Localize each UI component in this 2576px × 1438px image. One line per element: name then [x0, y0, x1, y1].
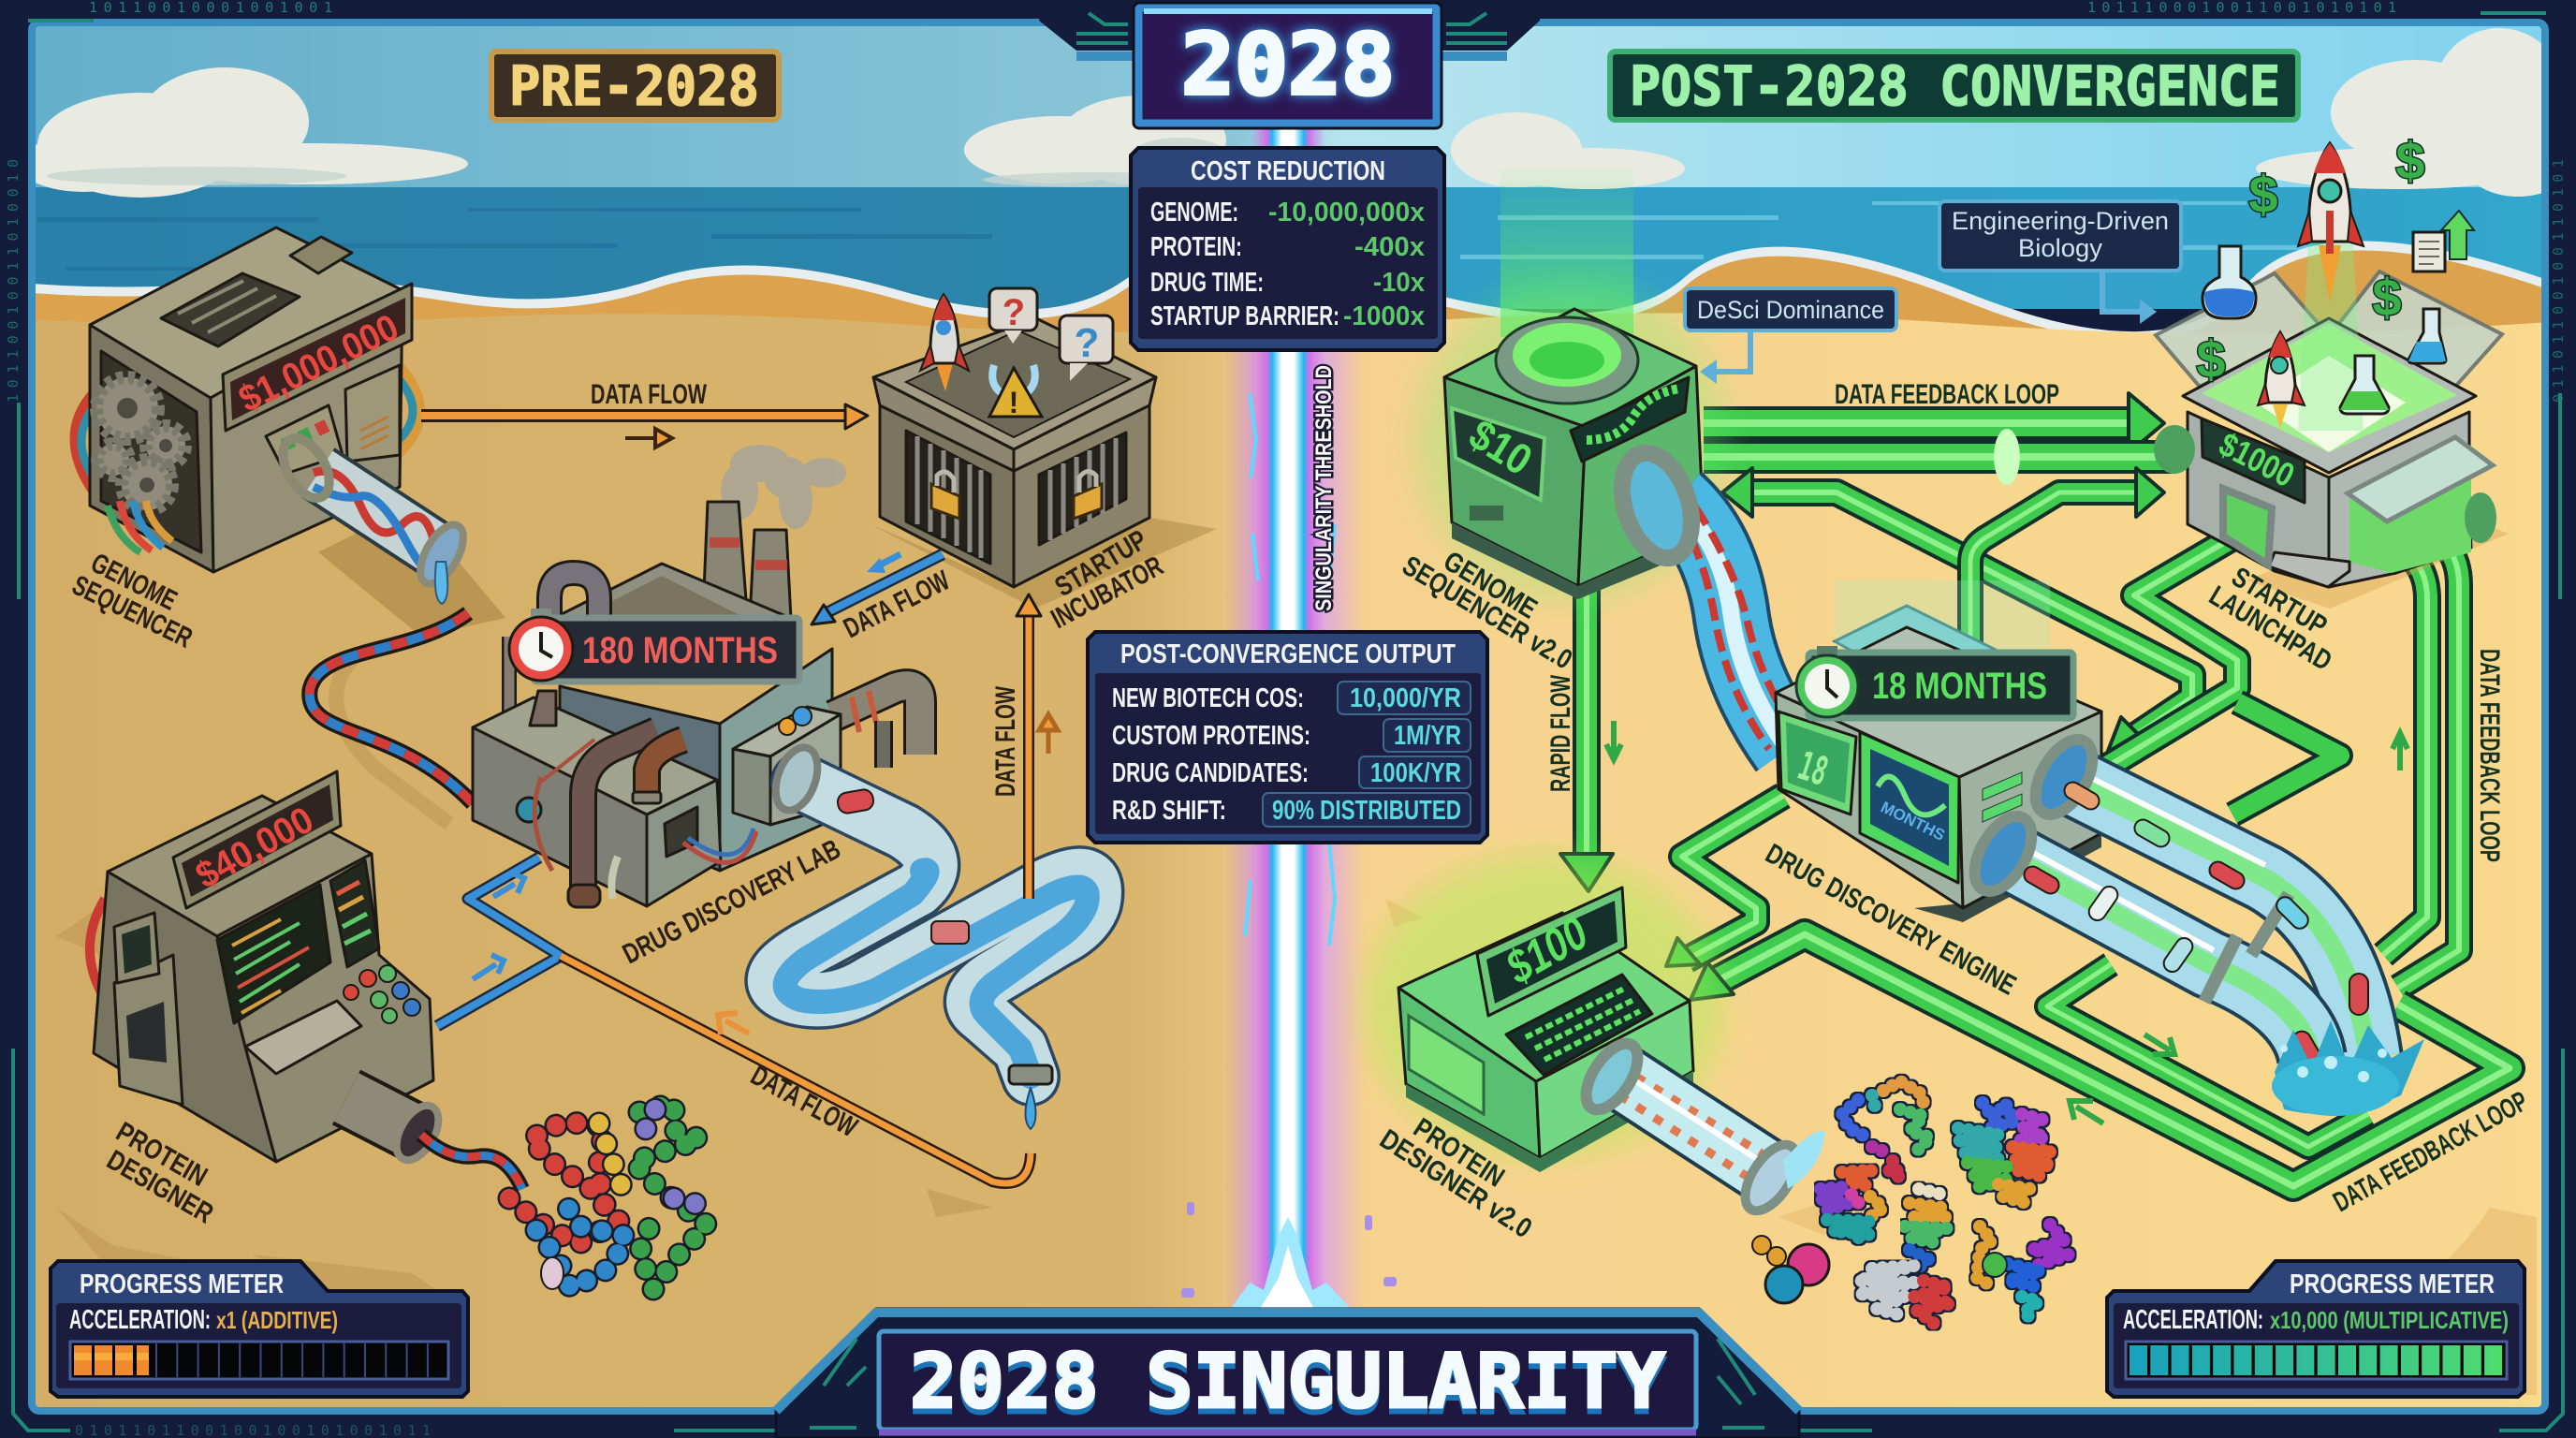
glass pipe serpentine: [768, 741, 1094, 1129]
pipe: upper data feedback loop: [1704, 393, 2164, 453]
row: r&d shift: R&D SHIFT:: [1112, 796, 1226, 826]
row: genome: GENOME:: [1150, 198, 1238, 227]
row: protein: [1150, 232, 1425, 262]
callout: engineering-driven biology: [1939, 201, 2181, 324]
row: protein: PROTEIN:: [1150, 232, 1242, 262]
icon: warning triangle: !: [1009, 386, 1018, 419]
machine: genome sequencer v2.0: $10: [1461, 409, 1541, 485]
row: custom proteins: 1M/YR: [1394, 721, 1461, 751]
pipe: engine to launchpad: [1970, 468, 2164, 655]
label: genome sequencer v2.0: SEQUENCER v2.0: [1397, 550, 1577, 676]
pipe: large data feedback loop: [1690, 934, 2510, 1186]
row: genome: [1150, 198, 1425, 227]
row: drug time: -10x: [1373, 268, 1425, 298]
label: genome sequencer: SEQUENCER: [67, 570, 198, 654]
folded proteins: [1752, 1081, 2069, 1325]
amino acid chain: bead protein: [421, 1103, 711, 1289]
machine: genome sequencer (legacy): $1,000,000: [232, 307, 405, 420]
water pipe with DNA to engine: [1610, 444, 1797, 749]
label: startup incubator: INCUBATOR: [1046, 550, 1168, 635]
arrow: vertical orange data flow: DATA FLOW: [990, 686, 1021, 797]
clouds: [19, 28, 2574, 198]
protein cluster: helix: [1905, 1189, 1952, 1269]
icon: question bubble blue: [1060, 315, 1113, 381]
icon: small rocket: [2258, 332, 2305, 429]
acceleration readout: x1 (ADDITIVE): [216, 1306, 338, 1334]
small green direction arrows: [1606, 721, 2408, 1123]
acceleration readout: ACCELERATION:: [2123, 1305, 2263, 1335]
label: drug discovery lab: DRUG DISCOVERY LAB: [618, 834, 845, 970]
glass tubes from engine to splash: [1963, 730, 2368, 1058]
icon: document: [2413, 232, 2445, 271]
arrow: data flow to incubator: [421, 379, 868, 448]
callout: engineering-driven biology: Biology: [2018, 234, 2102, 262]
tower: [560, 686, 720, 871]
label: data feedback loop right: DATA FEEDBACK LOOP: [2474, 649, 2505, 862]
icon: flask green: [2340, 356, 2389, 414]
row: drug candidates: 100K/YR: [1370, 758, 1461, 788]
machine: drug discovery lab: [473, 445, 920, 907]
arrow: orange data flow return: [561, 956, 1031, 1183]
heading: PROGRESS METER: [80, 1269, 284, 1299]
row: r&d shift: 90% DISTRIBUTED: [1272, 796, 1461, 826]
icon: question bubble red: ?: [1003, 292, 1025, 333]
acceleration readout: [2123, 1305, 2509, 1335]
arrow: orange data flow return: DATA FLOW: [746, 1060, 862, 1143]
label: genome sequencer: [67, 548, 198, 654]
launch glow: [2298, 178, 2364, 431]
label: data feedback loop top: DATA FEEDBACK LOOP: [1835, 379, 2059, 410]
label: genome sequencer v2.0: [1397, 546, 1577, 676]
roof: [560, 564, 783, 674]
pipe: launchpad to engine: [2059, 522, 2259, 796]
protein cluster: small molecule: [1752, 1236, 1829, 1303]
label: drug discovery engine: DRUG DISCOVERY ENGINE: [1761, 838, 2021, 1002]
lower left block: [473, 727, 647, 906]
copper pipes: [583, 730, 656, 899]
machine: genome sequencer v2.0: [1418, 281, 1727, 599]
label: rapid flow: RAPID FLOW: [1545, 675, 1576, 792]
badge: 180 months: [509, 609, 799, 682]
glow column above sequencer v2: [1500, 169, 1633, 337]
icon: question bubble red: [989, 288, 1037, 344]
label: startup incubator: STARTUP: [1050, 524, 1152, 603]
callout: desci dominance: DeSci Dominance: [1697, 296, 1884, 324]
right small block: [733, 707, 841, 756]
icon: green up arrow: [2441, 211, 2474, 259]
row: r&d shift: [1112, 793, 1471, 827]
binary strip left side: 10110010011010010: [5, 159, 22, 403]
label: protein designer: [101, 1116, 218, 1230]
banner: 2028 singularity: [776, 1309, 1799, 1438]
arrow: data flow to incubator: DATA FLOW: [591, 379, 707, 410]
pipe: engine to protein designer: [1666, 796, 1783, 966]
protein cluster: green ball: [1983, 1253, 2007, 1277]
row: new biotech companies: 10,000/YR: [1350, 683, 1461, 713]
row: genome: -10,000,000x: [1268, 198, 1425, 227]
machine: protein designer v2.0: [1367, 857, 1722, 1172]
icons: dollar signs: [2196, 131, 2425, 389]
icon: big rocket: [2298, 143, 2364, 302]
label: startup launchpad: STARTUP: [2226, 562, 2332, 642]
pipe: inner loop: [2047, 964, 2368, 1147]
arrows: blue flow from protein designer to lab: [437, 858, 561, 1026]
launchpad flaps: [2156, 271, 2502, 387]
machine: drug discovery engine: MONTHS: [1878, 799, 1948, 844]
row: new biotech companies: [1112, 682, 1471, 714]
pills in tubes: [2021, 779, 2368, 1073]
arrow: blue data flow from incubator to lab: DATA FLOW: [839, 565, 955, 644]
icon: flask blue: [2203, 246, 2256, 318]
icon: warning triangle: [989, 365, 1042, 419]
label: startup launchpad: [2203, 562, 2337, 677]
label: protein designer: PROTEIN: [110, 1116, 212, 1193]
icons: dollar signs: $: [2372, 268, 2402, 327]
pipe: launchpad right drop lines: [2380, 527, 2459, 988]
banner: 2028 singularity: 2028 SINGULARITY: [910, 1338, 1665, 1425]
arrow: blue data flow from incubator to lab: [812, 554, 955, 644]
row: protein: -400x: [1354, 232, 1425, 262]
protein cluster: grey and red: [1858, 1266, 1952, 1325]
icons: dollar signs: $: [2248, 165, 2278, 224]
row: startup barrier: STARTUP BARRIER:: [1150, 301, 1339, 331]
title: post-2028 convergence: POST-2028 CONVERGENCE: [1630, 54, 2280, 118]
row: custom proteins: [1112, 719, 1471, 752]
label: protein designer v2.0: DESIGNER v2.0: [1374, 1123, 1537, 1244]
pipe: return to sequencer and engine: [1722, 468, 2192, 751]
side pipe: [833, 685, 920, 755]
chimneys: [702, 502, 792, 637]
machine: startup launchpad: $1000: [2213, 425, 2301, 494]
row: drug time: [1150, 268, 1425, 298]
label: genome sequencer: GENOME: [86, 548, 182, 617]
protein cluster: rainbow: [1821, 1170, 1883, 1240]
pipe: rapid flow: [1560, 586, 1613, 891]
machine: genome sequencer (legacy): [75, 227, 505, 637]
badge: 18 months: [1796, 646, 2073, 718]
panel: cost reduction: [1131, 148, 1444, 350]
label: startup launchpad: LAUNCHPAD: [2203, 580, 2337, 677]
acceleration readout: x10,000 (MULTIPLICATIVE): [2270, 1306, 2509, 1334]
title: pre-2028: PRE-2028: [509, 54, 759, 118]
machine: protein designer v2.0: $100: [1497, 906, 1597, 994]
heading: POST-CONVERGENCE OUTPUT: [1120, 639, 1456, 669]
machine: protein designer (legacy): $40,000: [189, 799, 320, 897]
label: protein designer v2.0: [1374, 1112, 1537, 1244]
icons: dollar signs: $: [2395, 131, 2425, 190]
panel: progress meter post-2028: [2107, 1261, 2525, 1397]
green feedback pipes: [1560, 393, 2510, 1186]
protein cluster: molecule: [1977, 1225, 2069, 1322]
vertical label: singularity threshold: SINGULARITY THRESHOLD: [1311, 365, 1337, 611]
water splash: [2272, 1020, 2424, 1116]
badge: 18 months: 18 MONTHS: [1872, 666, 2047, 707]
row: new biotech companies: NEW BIOTECH COS:: [1112, 683, 1304, 713]
machine: startup launchpad: [2154, 131, 2509, 609]
panel: progress meter pre-2028: [51, 1261, 468, 1397]
acceleration readout: ACCELERATION:: [69, 1305, 211, 1335]
machine: startup incubator: [871, 288, 1217, 609]
label: genome sequencer v2.0: GENOME: [1438, 546, 1543, 625]
icon: rocket on incubator: [920, 295, 969, 391]
panel: post-convergence output: [1088, 632, 1487, 843]
banner: 2028: [1134, 3, 1442, 128]
protein cluster: large folded: [1958, 1103, 2052, 1203]
smoke: [721, 445, 846, 529]
row: drug candidates: DRUG CANDIDATES:: [1112, 758, 1309, 788]
label: protein designer v2.0: PROTEIN: [1408, 1112, 1510, 1194]
icons: dollar signs: $: [2196, 330, 2226, 389]
row: custom proteins: CUSTOM PROTEINS:: [1112, 721, 1310, 751]
heading: PROGRESS METER: [2290, 1269, 2495, 1299]
callout: engineering-driven biology: Engineering-Driven: [1952, 207, 2169, 235]
DNA strand between sequencer and lab: [310, 613, 473, 803]
glass tube with proteins: [1575, 1035, 1825, 1219]
row: drug time: DRUG TIME:: [1150, 268, 1264, 298]
icon: flask cyan: [2408, 309, 2446, 363]
label: protein designer: DESIGNER: [101, 1144, 218, 1230]
row: startup barrier: -1000x: [1343, 301, 1425, 331]
launchpad body: [2188, 412, 2329, 587]
meter bar: [2126, 1342, 2507, 1379]
heading: COST REDUCTION: [1191, 156, 1385, 186]
machine: protein designer (legacy): [90, 771, 447, 1167]
machine: drug discovery engine: [1776, 580, 2101, 922]
singularity beam: [1181, 112, 1397, 1320]
callout: desci dominance: [1685, 288, 1896, 384]
launchpad rim: [2183, 318, 2476, 473]
pipe: second feedback line: [1704, 429, 2176, 485]
banner: 2028: 2028: [1181, 16, 1395, 114]
pipe: outer engine bypass: [2232, 702, 2340, 814]
protein cluster: ring: [1842, 1081, 1930, 1178]
arrow: vertical orange data flow: [990, 594, 1058, 899]
binary strip right side: 01101100100110101: [2550, 159, 2567, 403]
meter bar: [70, 1342, 448, 1379]
badge: 180 months: 180 MONTHS: [582, 630, 778, 671]
icon: question bubble blue: ?: [1075, 320, 1099, 366]
machine: drug discovery engine: 18: [1793, 743, 1833, 796]
